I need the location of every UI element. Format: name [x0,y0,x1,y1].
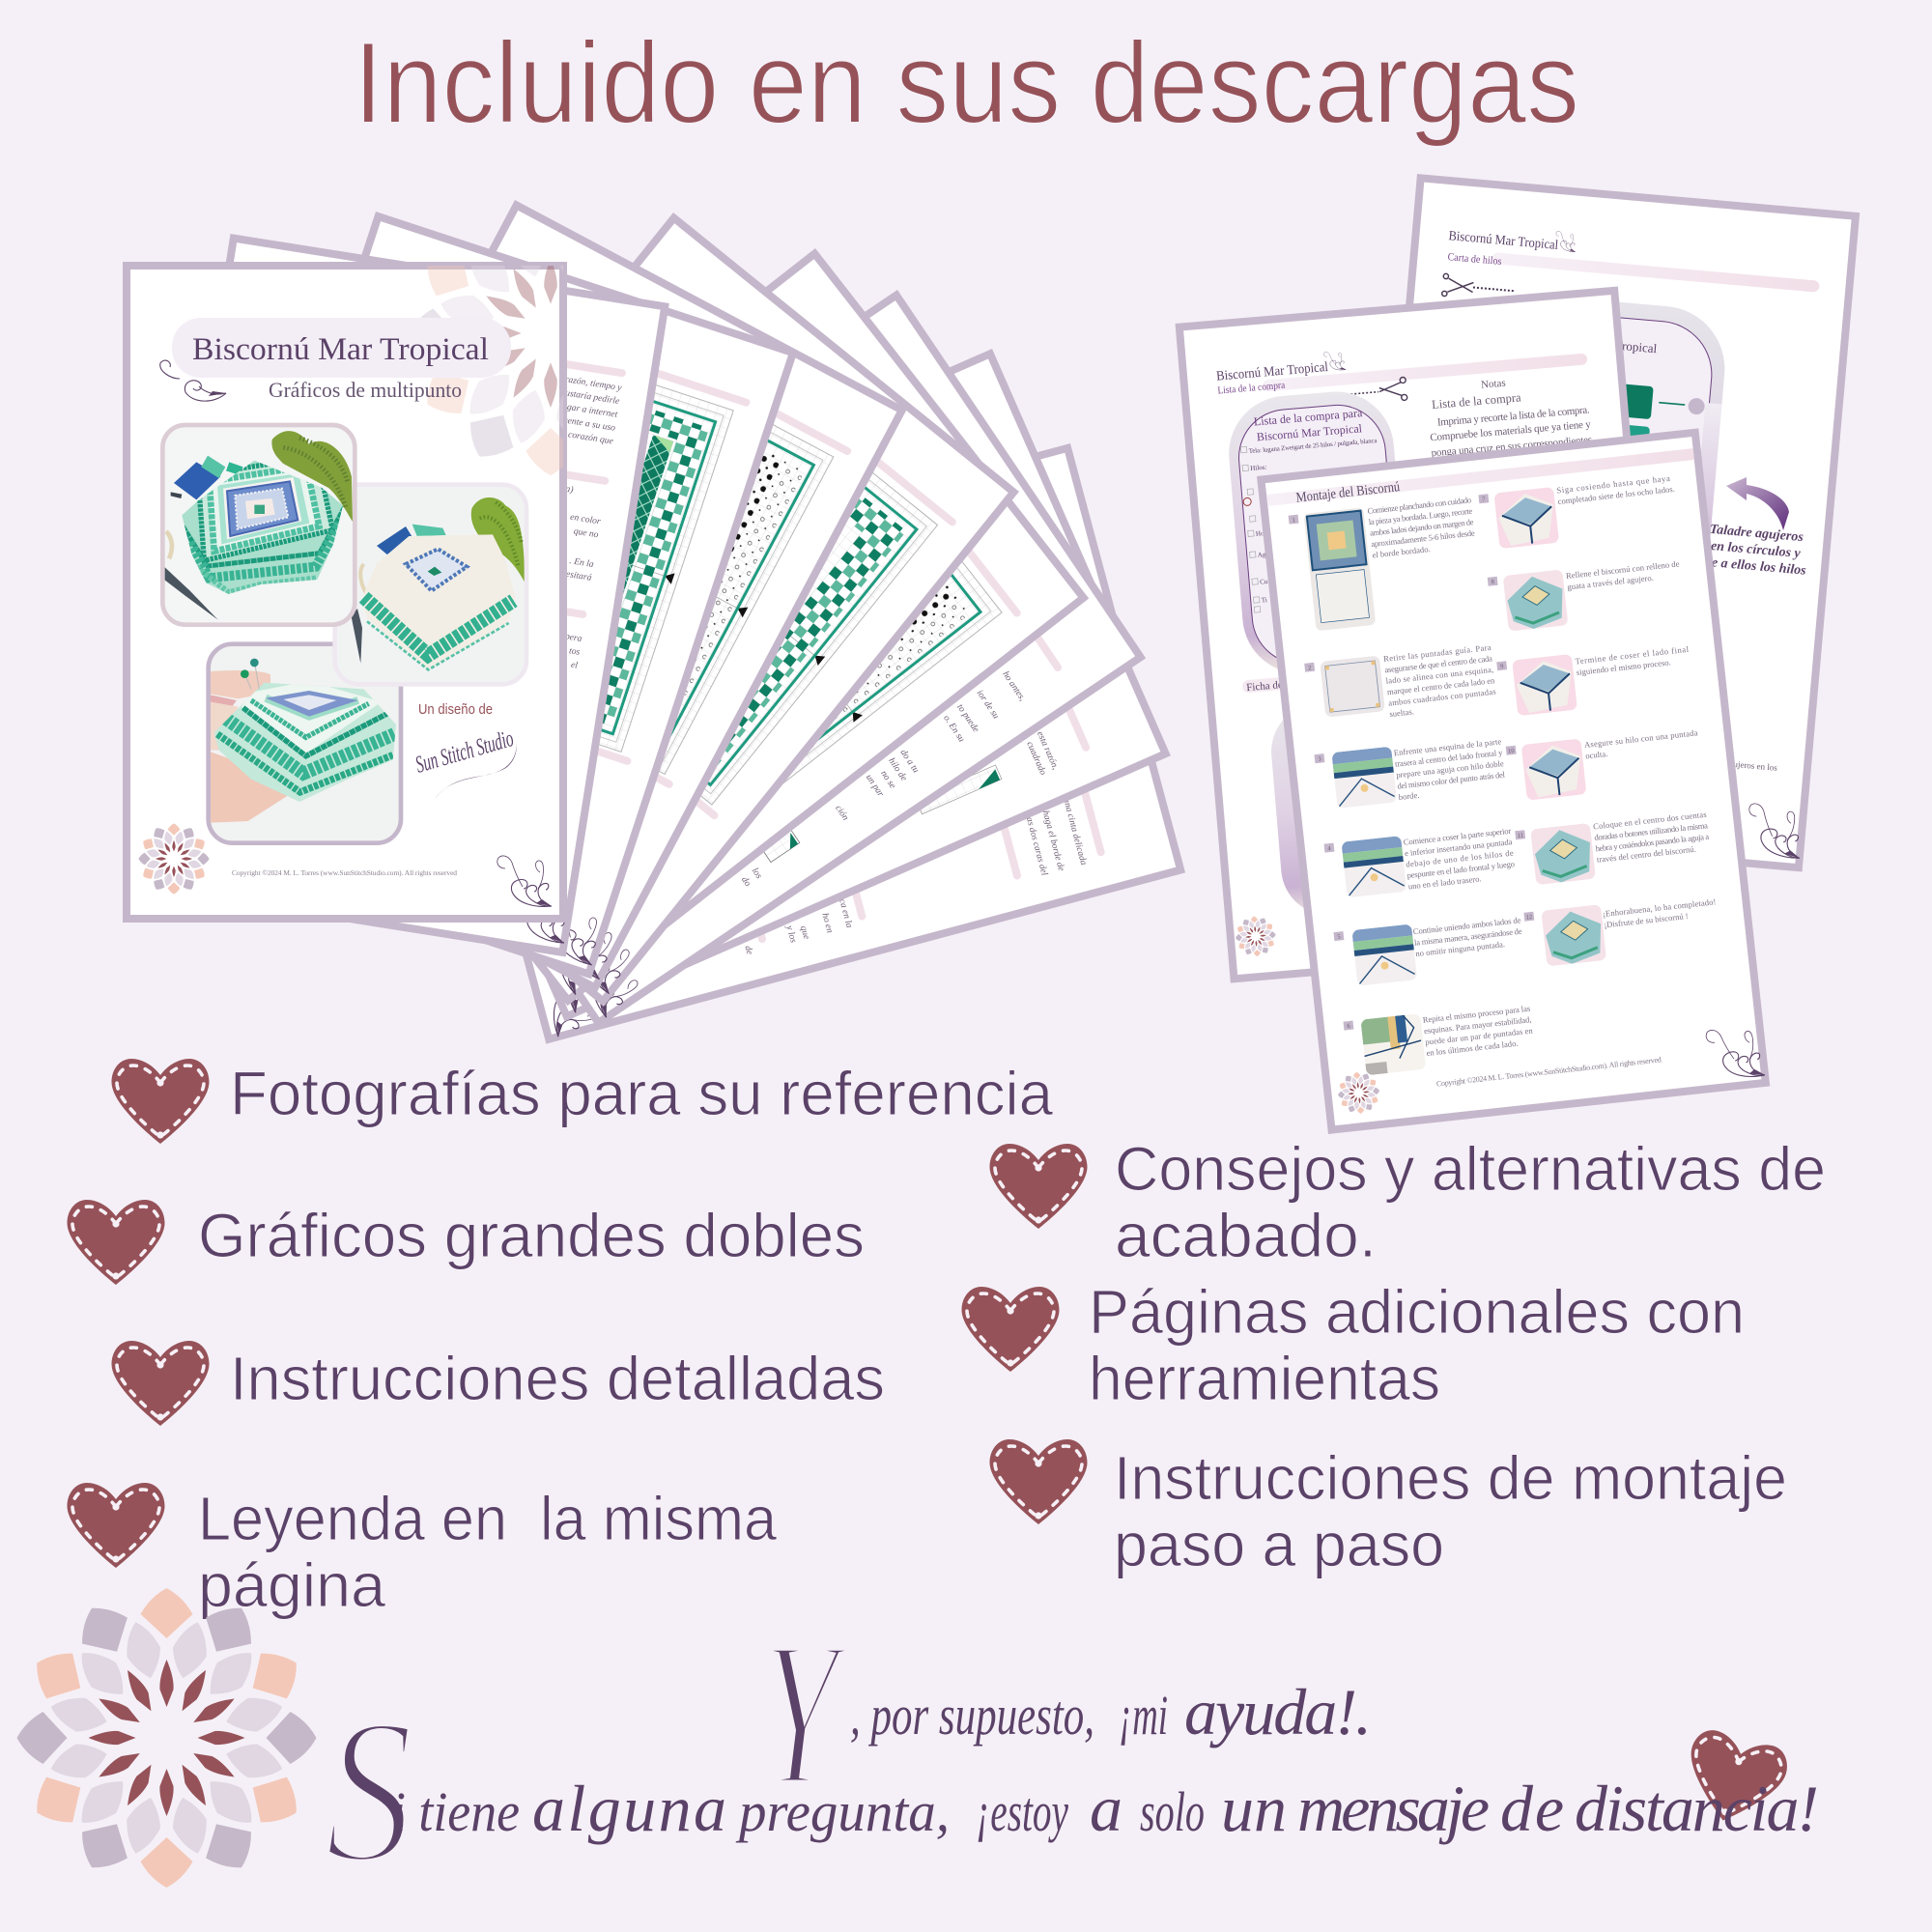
page 8: notes text: de [742,945,755,956]
page 1: intro text: tos [568,645,581,658]
fan of chart pages [131,205,1180,1039]
page A: thread chart [1364,178,1856,867]
heading band [1266,447,1694,509]
step numbers: 1 [1292,517,1295,524]
thread sheet label [1242,670,1358,694]
page C copyright: Copyright ©2024 M. L. Torres (www.SunStitchStudio.com). All rights reserved [1436,1055,1662,1089]
item: tips: Consejos y alternativas de [1115,1134,1826,1204]
step texts left: Continúe uniendo ambos lados de [1412,915,1521,936]
page 7: notes with small chart: esta razón, [1035,729,1061,771]
page 5: dot chart [299,254,1084,1001]
page 1: intro text: de llegar a internet [546,398,618,420]
thread card panel: Tropical [1614,338,1658,355]
closing script message: ayuda!. [1184,1675,1372,1748]
step texts left: Comienze planchando con cuidado [1367,495,1471,516]
item: double charts [68,1200,865,1285]
step texts left: pespunte en el lado frontal y luego [1406,859,1515,880]
designer credit: Un diseño de [418,702,493,718]
feature list right [962,1134,1826,1579]
notes [1426,371,1593,459]
step texts left: puede dar un par de puntadas en [1425,1025,1534,1047]
shopping card panel: Lista de la compra para [1253,406,1363,429]
page 6: notes with small chart: o. En su [941,713,967,744]
item: instructions: Instrucciones detalladas [230,1344,885,1413]
step texts left: debajo de uno de los hilos de [1406,848,1514,869]
large mandala [17,1588,317,1888]
page 1: intro text: el [570,660,579,671]
step texts left: ambos cuadrados con puntadas [1388,687,1497,708]
page B: shopping list: Lista de la compra [1217,381,1286,397]
step texts left: en los últimos de cada lado. [1426,1038,1519,1058]
page B: shopping list: Biscornú Mar Tropical [1216,360,1329,384]
closing script message: un [1221,1772,1287,1845]
page 6: notes with small chart: ior de su [975,688,1002,721]
page 7: notes with small chart: cuadrado [1024,740,1048,777]
photo 3: biscornu in hand [209,644,401,843]
step numbers: 3 [1318,756,1321,763]
shopping card panel: Hilos: [1250,464,1267,472]
thread photo panel [1267,695,1439,920]
notes: Imprima y recorte la lista de la compra. [1437,404,1590,429]
page 7: notes with small chart [391,354,1166,1016]
step texts right [1556,472,1721,929]
cover swirl [497,856,552,906]
step photos [1303,487,1616,1076]
step texts right: Rellene el biscornú con relleno de [1565,558,1680,581]
page 8: notes text: y los [783,923,799,944]
step texts right: través del centro del biscornú. [1596,844,1696,865]
page 6: notes with small chart: ción [833,804,851,823]
faded mandala on cover [420,266,563,475]
step numbers: 4 [1327,845,1332,852]
step texts left: esquinas. Para mayor estabilidad, [1423,1014,1532,1036]
step texts right: Siga cosiendo hasta que haya [1556,473,1670,496]
step numbers: 5 [1337,933,1341,941]
page 1: intro text: corazón, tiempo y [555,373,623,393]
arrow: drill holes [1726,477,1789,530]
page C: assembly instructions [1261,433,1766,1130]
step texts right: doradas o botones utilizando la misma [1594,820,1708,842]
shopping card panel [1224,387,1412,678]
page 6: notes with small chart: do a tu [898,748,922,775]
page 1: intro text: pera [563,631,582,644]
step texts left: e inferior insertando una puntada [1405,837,1513,858]
step numbers [1289,494,1544,1031]
closing script message: mensaje [1297,1772,1490,1845]
note: drill holes: Taladre agujeros [1709,523,1804,545]
designer credit [412,702,517,799]
shopping card panel: Ag [1258,551,1266,559]
page 3: dot chart [210,205,902,987]
closing script message: i tiene [391,1780,520,1843]
step texts right: Coloque en el centro dos cuentas [1593,810,1708,831]
notes: ponga una cruz en sus correspondientes [1431,434,1593,459]
page 6: notes with small chart: un par [864,773,886,799]
page 8: notes text: una cinta delicada [1061,797,1089,867]
designer credit: Sun Stitch Studio [412,725,517,779]
step texts left: del mismo color del punto atrás del [1397,770,1506,791]
page C swirl [1706,1025,1765,1081]
step texts left [1367,495,1535,1058]
heading band: Montaje del Biscornú [1295,479,1401,506]
closing script message [325,1598,1819,1906]
step texts left: el borde bordado. [1372,544,1431,560]
closing script message: solo [1140,1780,1205,1843]
page 6: notes with small chart: no se [878,769,898,791]
page 1: intro text: en color [569,512,602,527]
step texts left: borde. [1398,790,1420,802]
notes: Notas [1481,378,1506,391]
page 6: notes with small chart: do [739,875,753,889]
page 6: notes with small chart: hilo de [886,756,910,783]
step texts left: aproximadamente 5-6 hilos desde [1371,527,1475,549]
page A: thread chart: agujeros en los [1725,758,1778,773]
step texts left: Enfrente una esquina de la parte [1393,736,1502,757]
closing script message: ¡mi [1119,1684,1168,1747]
page 2: check chart [174,216,793,974]
page 8: notes text: las dos caras del [1023,813,1050,877]
notes: Lista de la compra [1432,390,1522,412]
photo 2: plain side of biscornu [335,485,526,684]
item: photos: Fotografías para su referencia [230,1059,1053,1128]
page A: thread chart: Biscornú Mar Tropical [1448,229,1559,253]
item: instructions [112,1341,885,1426]
page 1: intro text: de corazón que [556,428,614,447]
item: extra pages: herramientas [1089,1344,1440,1413]
page 1: intro text: me gustaría pedirle [547,384,621,407]
cover page [123,262,567,923]
cover photos [162,425,526,843]
closing script message: alguna [532,1772,726,1845]
step texts right: ¡Enhorabuena, lo ha completado! [1602,896,1717,919]
step texts left: ambos lados dejando un margen de [1369,517,1474,538]
shopping card panel: Biscornú Mar Tropical [1256,421,1363,443]
shopping card panel: Cu [1260,578,1268,586]
closing script message: de [1500,1772,1564,1845]
step texts left: la misma manera, asegurándose de [1414,926,1522,948]
step numbers: 9 [1500,664,1504,670]
page 1: intro text: gratamente a su uso [540,412,616,434]
closing script message: Y [759,1598,851,1829]
step texts right: siguiendo el mismo proceso. [1576,657,1671,677]
closing script message: S [325,1675,413,1906]
notes: Compruebe los materials que ya tiene y [1430,418,1592,443]
step numbers: 11 [1517,832,1523,839]
note: drill holes: ate a ellos los hilos [1700,554,1807,579]
step numbers: 12 [1525,914,1533,922]
title: Incluido en sus descargas [354,18,1579,148]
step 1 photo [1303,507,1376,631]
step texts left: marque el centro de cada lado en [1386,675,1495,696]
item: extra pages: Páginas adicionales con [1089,1277,1745,1347]
cover title pill [172,318,511,402]
page 6: notes with small chart: los [750,866,764,881]
step texts right: Termine de coser el lado final [1575,644,1690,666]
item: tips [989,1134,1826,1270]
page 6: notes with small chart: to puede [954,702,981,735]
step numbers: 6 [1347,1023,1351,1030]
cover small mandala [138,823,210,895]
page 4: check chart [263,218,1013,1001]
item: extra pages [962,1277,1745,1413]
scissors [1350,377,1407,405]
item: legend: Leyenda en la misma [198,1484,777,1553]
shopping card panel: Tela: lugana Zweigart de 25 hilos / pulgada, blanca [1249,438,1378,455]
item: legend [68,1483,777,1620]
item: tips: acabado. [1115,1201,1377,1270]
closing script message: ¡estoy [976,1780,1068,1843]
closing script message: pregunta, [735,1780,950,1843]
step texts right: completado siete de los ocho lados. [1557,484,1675,506]
title swirl [160,360,226,401]
item: assembly [989,1439,1787,1579]
step texts left: Retire las puntadas guía. Para [1383,642,1492,664]
bottom heart [1676,1725,1792,1833]
step numbers: 7 [1482,497,1487,503]
page 1: intro text: que no [573,526,599,540]
item: assembly: Instrucciones de montaje [1114,1443,1787,1513]
item: double charts: Gráficos grandes dobles [198,1201,865,1270]
step texts left: Repita el mismo proceso para las [1422,1004,1531,1025]
page C mandala [1336,1069,1381,1116]
step texts left: Comience a coser la parte superior [1403,826,1512,847]
step numbers: 2 [1308,665,1312,671]
item: legend: página [198,1550,385,1620]
page 1: intro text: necesitará [553,567,592,583]
step texts left: no omitir ninguna puntada. [1415,939,1505,958]
step texts left: uno en el lado trasero. [1407,873,1482,892]
step numbers: 10 [1508,748,1515,755]
page 6: notes with small chart [355,296,1141,1023]
step texts left: asegurarse de que el centro de cada [1384,653,1492,674]
step texts right: hebra y cosiéndolos pasando la aguja a [1595,832,1710,853]
step texts left: trasera al centro del lado frontal y [1394,748,1504,769]
cover title pill: Gráficos de multipunto [269,378,462,402]
closing script message: distancia! [1575,1772,1819,1845]
step texts right: guata a través del agujero. [1567,573,1654,591]
shopping card panel: Ti [1261,596,1267,605]
page 6: notes with small chart: ho antes, [1000,669,1028,703]
shopping card panel: Ho [1256,529,1264,538]
step texts left: lado se alinea con una esquina, [1385,665,1494,686]
note: drill holes [1700,523,1807,579]
page 8: notes text: que [798,924,812,941]
page 8: notes text: ca en la [837,897,855,929]
thread card panel [1455,291,1730,764]
step texts left: prepare una aguja con hilo doble [1396,758,1504,780]
closing script message: , por supuesto, [850,1684,1094,1747]
page B: shopping list [1179,291,1669,979]
feature list left [68,1059,1053,1620]
page 1: intro text: (a) [561,483,574,496]
photo 1: front of biscornu [162,425,355,625]
page 1: intro text [131,239,665,952]
cover title pill: Biscornú Mar Tropical [192,332,489,367]
step texts right: oculta. [1585,749,1608,760]
page 8: notes text: ho en [819,912,836,934]
step texts right: Asegure su hilo con una puntada [1583,727,1698,750]
cover copyright: Copyright ©2024 M. L. Torres (www.SunStitchStudio.com). All rights reserved [232,868,457,877]
item: assembly: paso a paso [1114,1510,1444,1579]
page 8: notes text: haga el borde de [1040,810,1066,873]
page B mandala [1234,915,1277,958]
page 1: intro text: . En la [569,555,595,570]
scissors [1441,273,1515,302]
step texts left: sueltas. [1389,706,1414,719]
step texts left: la pieza ya bordada. Luego, recorte [1368,506,1473,526]
step texts right: ¡Disfrute de su biscornú ! [1604,911,1689,929]
page 8: notes text [436,448,1180,1039]
closing script message: a [1090,1772,1122,1845]
page A: thread chart: Carta de hilos [1447,251,1502,268]
thread sheet label: Ficha de hilos [1246,677,1306,694]
note: drill holes: en los círculos y [1710,539,1802,561]
step numbers: 8 [1491,579,1494,585]
